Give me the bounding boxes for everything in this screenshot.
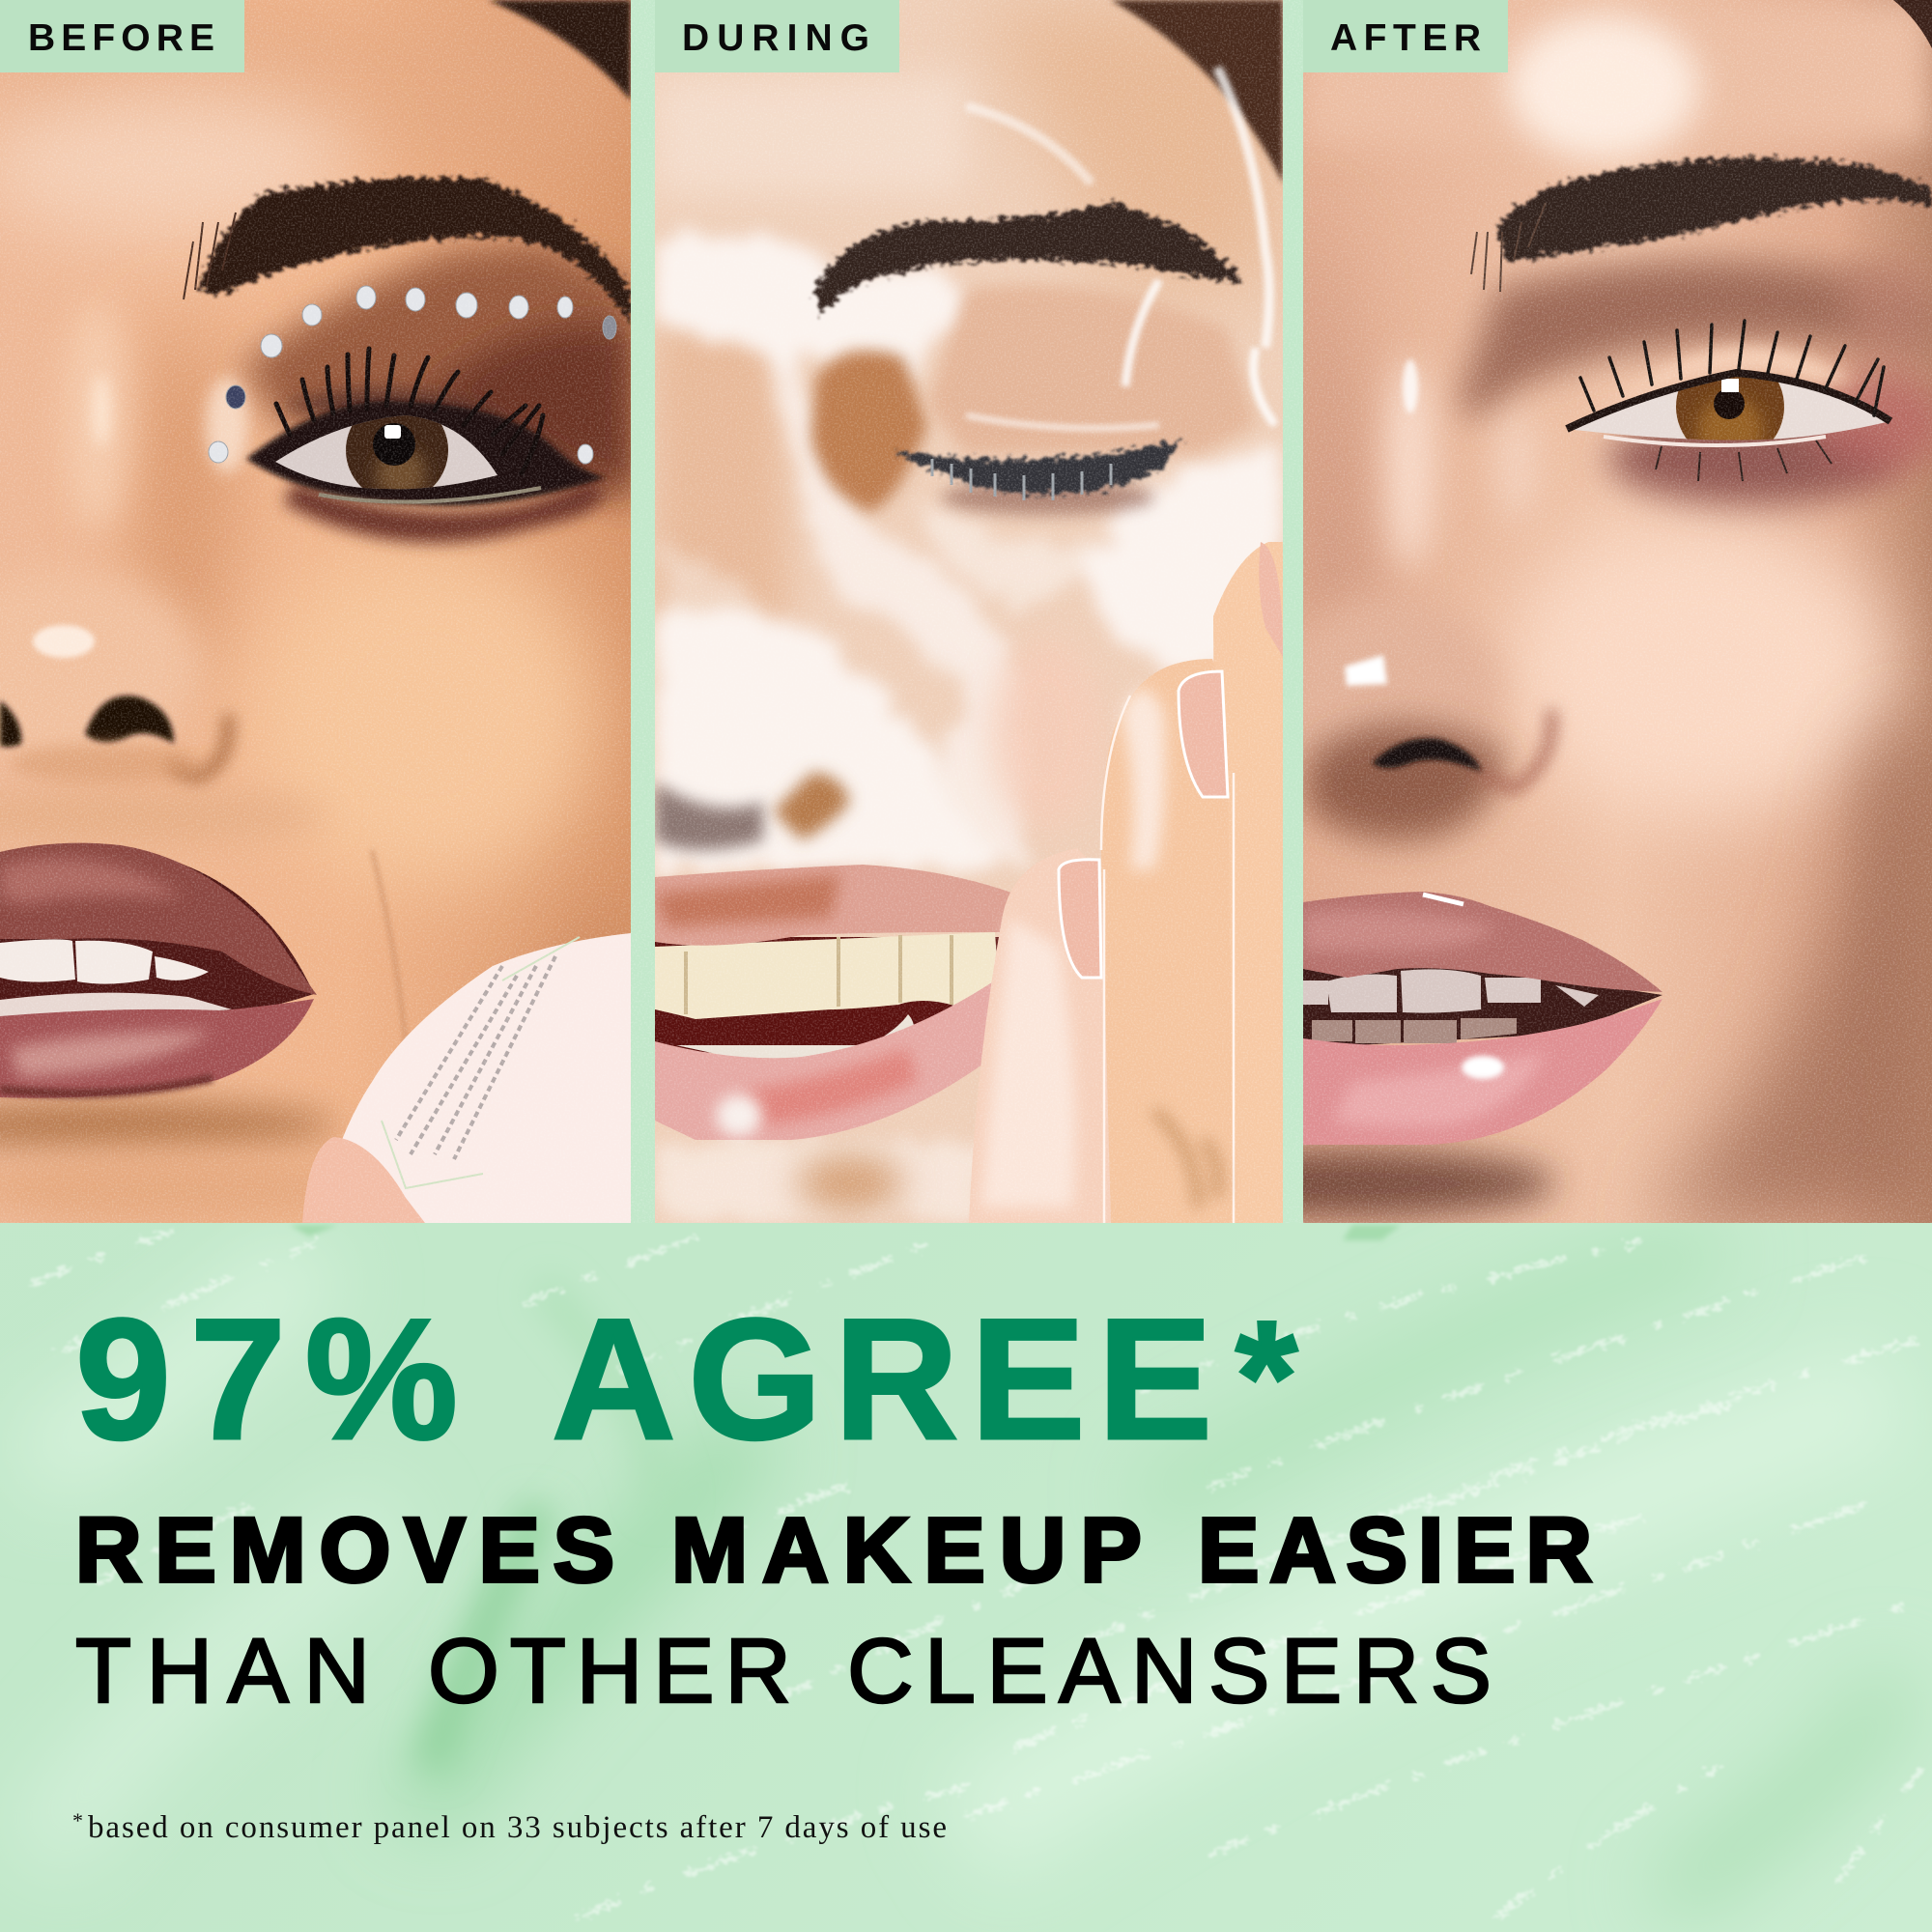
foam streaks <box>655 233 1283 1223</box>
eyeshadow <box>206 242 631 530</box>
label: before <box>0 0 244 72</box>
panel: during <box>655 0 1283 1223</box>
subheading: removes makeup easier: REMOVES <box>75 1499 614 1602</box>
nostrils <box>0 696 228 782</box>
heading: 97% agree: * <box>1236 1288 1298 1465</box>
footnote: based on consumer panel on 33 subjects after 7 days of use <box>88 1810 947 1845</box>
heading: 97% agree <box>75 1283 1298 1475</box>
closed eye lashes <box>894 440 1182 515</box>
eyebrow <box>184 177 631 324</box>
subheading: than other cleansers: THAN <box>75 1620 370 1722</box>
hair <box>1111 0 1283 348</box>
mouth and lips <box>655 865 1024 1140</box>
eye <box>1567 321 1932 503</box>
eyebrow <box>1471 158 1932 292</box>
label: after <box>1303 0 1508 72</box>
label: before: BEFORE <box>28 17 214 59</box>
lips and teeth <box>1303 892 1662 1145</box>
heading: 97% agree: 97% <box>75 1283 458 1475</box>
panel: before <box>0 0 631 1223</box>
label: after: AFTER <box>1330 17 1481 59</box>
exposed skin patches <box>655 106 1275 1212</box>
eye <box>246 349 607 505</box>
label: during <box>655 0 899 72</box>
subheading: removes makeup easier: EASIER <box>1198 1499 1592 1602</box>
panel: after <box>1150 0 1932 1223</box>
skin grain overlay <box>0 0 1932 1223</box>
product jar <box>328 933 631 1223</box>
hair <box>488 0 631 100</box>
lips and teeth <box>0 843 317 1098</box>
finger <box>302 1137 425 1223</box>
subheading: than other cleansers: OTHER <box>428 1620 791 1722</box>
fingers <box>969 542 1283 1223</box>
eyebrow <box>813 203 1244 314</box>
heading: 97% agree: AGREE <box>552 1283 1212 1475</box>
rhinestones <box>209 286 616 464</box>
nose and nostril <box>1303 655 1551 840</box>
subheading: than other cleansers: CLEANSERS <box>847 1620 1492 1722</box>
subheading: removes makeup easier: MAKEUP <box>671 1499 1140 1602</box>
label: during: DURING <box>682 17 869 59</box>
footnote: * <box>72 1808 83 1833</box>
hair <box>1893 0 1932 48</box>
